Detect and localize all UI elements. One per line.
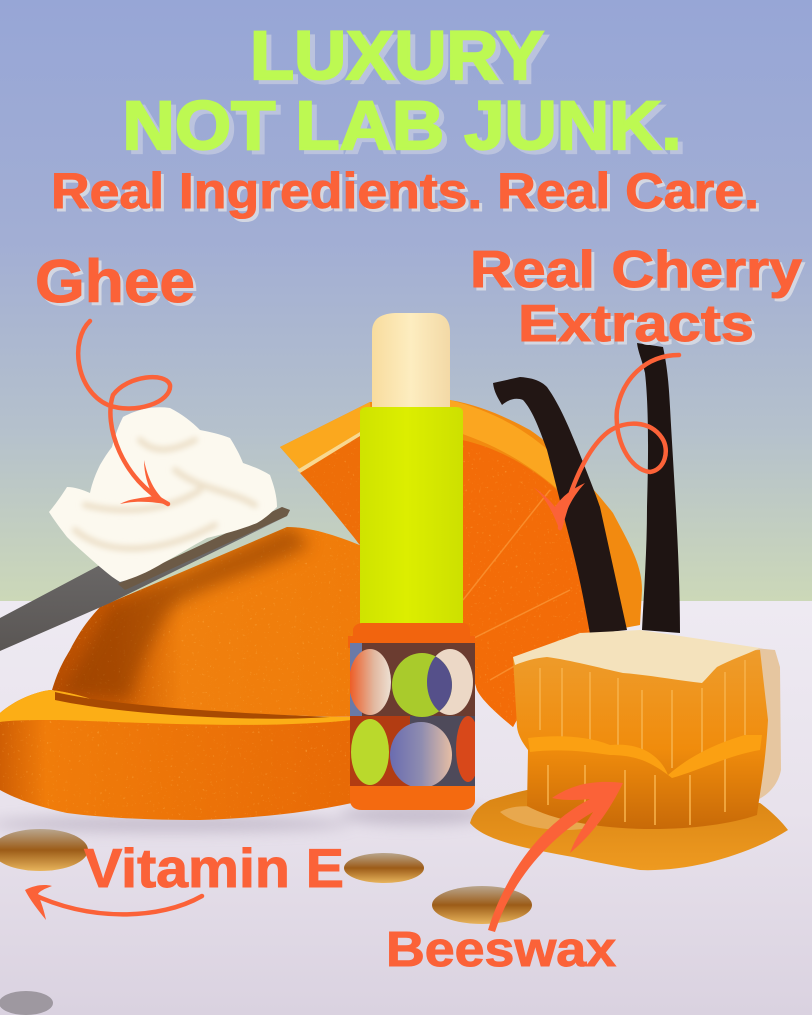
- label: Vitamin E: Vitamin E: [84, 837, 344, 899]
- honey cells: [540, 660, 745, 825]
- title: NOT LAB JUNK.: [122, 87, 682, 164]
- label: Real Cherry Extracts: Extracts: [521, 298, 757, 356]
- background sky: [0, 0, 812, 601]
- amber droplets: [0, 829, 532, 1015]
- table shadows: [0, 805, 490, 832]
- knife: [0, 507, 290, 651]
- subtitle: Real Ingredients. Real Care.: [54, 166, 762, 222]
- label: Real Cherry Extracts: Real Cherry: [473, 244, 805, 302]
- lip balm: [348, 313, 480, 810]
- title: LUXURY: [255, 21, 549, 98]
- orange slice bottom: [0, 690, 352, 820]
- label: Real Cherry Extracts: Extracts: [518, 295, 754, 353]
- label: Real Cherry Extracts: [470, 241, 805, 356]
- ghee: [49, 407, 277, 582]
- arrow: Beeswax: [488, 782, 623, 932]
- comb body: [513, 650, 768, 829]
- arrow: Real Cherry Extracts: [533, 355, 679, 531]
- label: Ghee: Ghee: [38, 251, 198, 318]
- honeycomb: [513, 630, 781, 829]
- honey waist: [528, 735, 762, 778]
- vanilla pods: [493, 343, 680, 634]
- label: Ghee: Ghee: [35, 248, 195, 315]
- arrow: Ghee: [78, 321, 170, 505]
- comb top: [513, 630, 760, 683]
- balm stick: [372, 313, 450, 412]
- subtitle: Real Ingredients. Real Care.: [51, 163, 759, 219]
- label: Beeswax: Beeswax: [386, 923, 616, 977]
- translucent side: [740, 648, 781, 800]
- green tube: [360, 407, 463, 632]
- title: [122, 17, 686, 168]
- base foot: [350, 786, 475, 810]
- orange slice behind lipstick: [280, 400, 642, 727]
- orange collar: [348, 623, 475, 648]
- patterned base: [349, 643, 480, 788]
- arrow: Vitamin E: [25, 885, 202, 920]
- table surface: [0, 601, 812, 1015]
- lower orange half: [52, 525, 362, 717]
- label: Real Cherry Extracts: Real Cherry: [470, 241, 802, 299]
- title: LUXURY: [250, 17, 544, 94]
- title: NOT LAB JUNK.: [128, 91, 686, 168]
- honey pool: [470, 790, 788, 870]
